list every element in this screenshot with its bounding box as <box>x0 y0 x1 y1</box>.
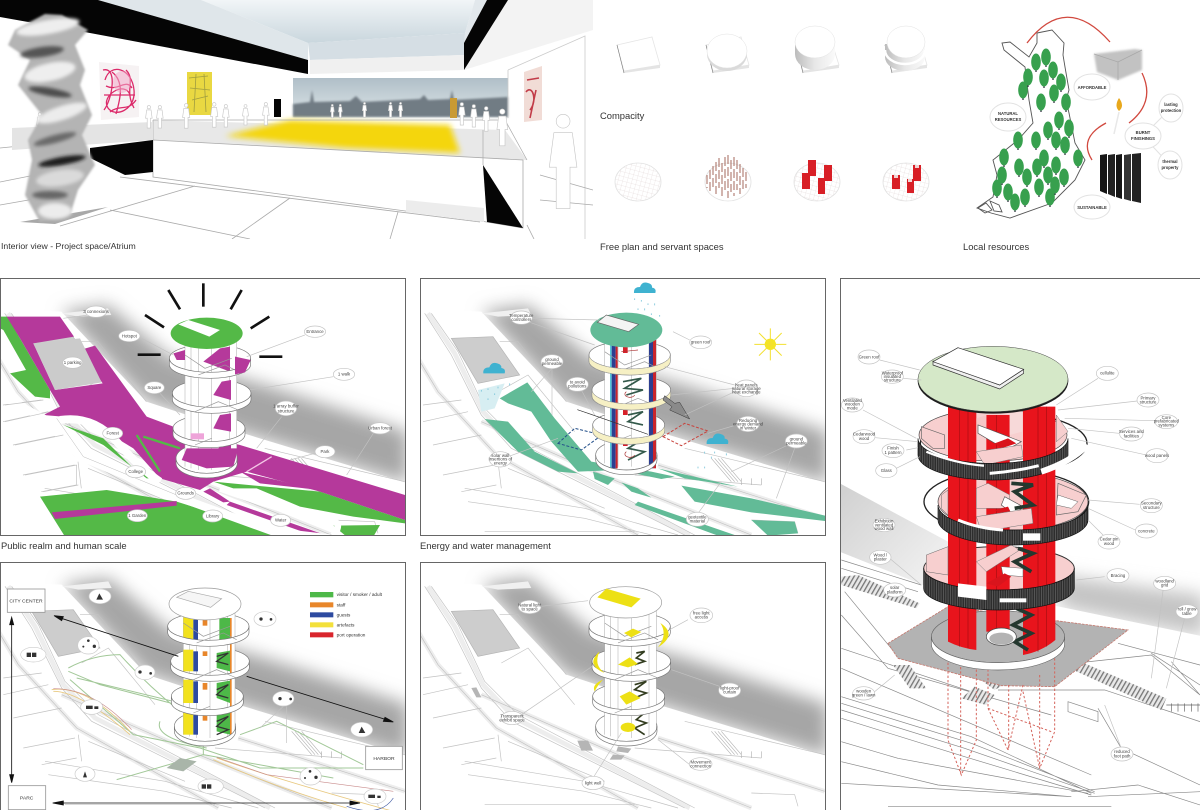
disc: grid <box>615 163 661 201</box>
caption: local resources: Local resources <box>963 241 1029 252</box>
diagram: compacity extrusion sequence <box>617 26 927 73</box>
match flame <box>1114 98 1122 134</box>
sunburst rays <box>138 283 282 357</box>
panel: public realm and human scale <box>0 283 408 555</box>
right wall edge <box>508 36 585 239</box>
disc: red cores <box>794 160 840 201</box>
direction arrows <box>10 616 393 805</box>
site base <box>411 305 828 555</box>
caption: interior view: Interior view - Project space/Atrium <box>1 241 136 251</box>
red arcs <box>1027 17 1147 160</box>
floor interiors <box>919 409 1089 590</box>
tower <box>168 588 249 746</box>
label bubbles: cellulite <box>1100 371 1115 376</box>
label bubbles: structure <box>1143 505 1160 510</box>
wall door <box>274 99 281 117</box>
label bubbles: concrete <box>1138 528 1155 533</box>
label bubbles: structure <box>1140 400 1157 405</box>
label: thermal property: thermal <box>1162 159 1178 164</box>
label bubbles: foot path <box>1114 753 1131 758</box>
label bubbles: light well <box>585 780 601 785</box>
legend: artefacts <box>337 622 355 627</box>
label bubbles: Cedar pin <box>1100 537 1119 542</box>
massing: plate with disc <box>706 34 749 73</box>
burnt wood panels <box>1100 153 1141 203</box>
label bubbles: ventilated <box>875 522 894 527</box>
label bubbles: Hotspot <box>122 333 138 338</box>
diagram: free plan and servant spaces <box>615 155 929 201</box>
label bubbles: ground <box>790 436 804 441</box>
label: burnt finishings: BURNT <box>1136 130 1151 135</box>
green roof disc <box>918 346 1068 414</box>
label: lasting protection: lasting <box>1164 102 1178 107</box>
massing: cylinder <box>795 26 839 73</box>
black cladding bands <box>918 438 1088 610</box>
caption: public realm: Public realm and human scale <box>1 540 127 551</box>
sun <box>754 328 786 360</box>
black ceiling beams <box>0 0 508 74</box>
panel: circulation and user flows <box>0 578 408 810</box>
terrain shading <box>840 483 1200 708</box>
site contour lines <box>841 560 1200 807</box>
label bubbles: heat panels <box>735 382 758 387</box>
label bubbles: woodland <box>1155 578 1175 583</box>
label bubbles: Green roof <box>859 354 880 359</box>
air flow arrows <box>577 396 690 434</box>
red dashed projection lines <box>948 658 1055 775</box>
label bubbles: wood wall <box>874 526 894 531</box>
painting: right wall <box>524 66 542 122</box>
label: thermal property: property <box>1162 165 1179 170</box>
label bubbles: material <box>690 519 705 524</box>
box: parc: PARC <box>20 795 34 801</box>
label bubbles: Finish <box>887 446 899 451</box>
diagram: local resources map of Finland <box>977 17 1183 219</box>
floor plane <box>0 140 593 239</box>
legend <box>310 592 383 637</box>
label bubbles <box>489 311 807 526</box>
teal planted areas <box>485 382 825 536</box>
label: thermal property <box>1158 151 1182 179</box>
label bubbles: wood <box>859 436 870 441</box>
leader lines <box>63 315 373 475</box>
label bubbles: 1 array buffer <box>273 404 299 409</box>
panel: daylight strategy <box>411 578 828 810</box>
label bubbles: Square <box>147 385 162 390</box>
label bubbles: Library <box>206 513 220 518</box>
pictogram glyphs <box>27 593 381 798</box>
site base <box>0 578 408 810</box>
label bubbles: Exhibition <box>875 519 894 524</box>
label: lasting protection <box>1159 94 1183 122</box>
label bubbles: access <box>695 615 708 620</box>
label bubbles: light-proof <box>720 686 740 691</box>
water infiltration zone <box>478 383 505 412</box>
label bubbles: permeable <box>786 440 807 445</box>
label bubbles: heat exchange <box>732 390 761 395</box>
site base <box>0 305 408 555</box>
panel frame: public realm <box>0 278 406 536</box>
label: sustainable <box>1074 195 1110 219</box>
panel frame: daylight <box>420 562 826 810</box>
label bubbles <box>499 600 741 790</box>
label bubbles: Temperature <box>509 313 534 318</box>
hatched paving strips <box>841 575 1200 712</box>
left site lines <box>5 400 78 492</box>
text: compacity: Compacity <box>600 110 645 121</box>
label bubbles: solar <box>890 585 900 590</box>
caption: energy and water: Energy and water management <box>420 540 551 551</box>
leader lines <box>260 706 287 743</box>
box: city center: CITY CENTER <box>9 599 43 605</box>
panel: interior view of project space atrium <box>0 0 593 239</box>
red structural columns <box>948 407 1055 655</box>
box: harbor <box>366 746 402 770</box>
ceiling <box>201 0 475 43</box>
label bubbles: Wood / <box>874 552 888 557</box>
grey crossing <box>167 758 197 771</box>
green ground areas <box>0 317 405 537</box>
map outline <box>977 30 1085 218</box>
legend: port operation <box>337 632 366 637</box>
label bubbles: table <box>1182 611 1192 616</box>
label bubbles: roll / grow <box>1178 607 1197 612</box>
white roads <box>0 395 330 538</box>
painting: yellow <box>187 72 212 115</box>
label bubbles: green / lawn <box>852 693 876 698</box>
disc: columns <box>705 155 751 201</box>
disc: red cores with openings <box>883 163 929 201</box>
dark spiral stairs <box>1011 483 1033 650</box>
label bubbles: to space <box>521 606 538 611</box>
label: natural resources: NATURAL <box>998 111 1018 116</box>
legend: guests <box>337 612 351 617</box>
label bubbles: wooden <box>845 402 861 407</box>
panel frame: energy and water <box>420 278 826 536</box>
label bubbles: Ventilated <box>843 398 862 403</box>
tower <box>169 318 251 478</box>
site base <box>411 578 828 810</box>
rain clouds <box>481 282 728 468</box>
flow lines: green <box>68 655 363 780</box>
label bubbles: Movement <box>691 759 712 764</box>
panel: structure and materials exploded axonometric <box>840 346 1200 807</box>
massing: stacked cylinder <box>885 26 927 73</box>
label bubbles: green roof <box>691 340 711 345</box>
label bubbles: connection <box>690 763 712 768</box>
label bubbles: Grounds <box>177 491 194 496</box>
tower <box>589 587 671 746</box>
label bubbles: Core <box>1162 415 1172 420</box>
box: city center <box>7 589 45 612</box>
magenta public realm <box>7 317 405 537</box>
label bubbles: Natural light <box>518 602 542 607</box>
label bubbles: permeable <box>542 361 563 366</box>
label bubbles <box>841 350 1198 761</box>
label bubbles: 1 Garden <box>128 513 147 518</box>
label: sustainable: SUSTAINABLE <box>1077 205 1107 210</box>
archipelago <box>978 201 1002 213</box>
label bubbles: Glass <box>881 468 892 473</box>
label bubbles: plaster <box>874 557 887 562</box>
label bubbles: Park <box>321 449 330 454</box>
sculpture <box>8 14 108 224</box>
label bubbles: grid <box>1161 583 1169 588</box>
box: harbor: HARBOR <box>373 756 395 762</box>
tower <box>589 313 671 475</box>
label: natural resources <box>990 103 1026 131</box>
label bubbles: 1 pattern <box>884 450 902 455</box>
stair landing circle <box>986 628 1016 645</box>
label bubbles: systems <box>1158 422 1174 427</box>
label: burnt finishings: FINISHINGS <box>1131 136 1155 141</box>
label bubbles: to avoid <box>570 380 585 385</box>
caption: free plan: Free plan and servant spaces <box>600 241 724 252</box>
label: natural resources: RESOURCES <box>995 117 1021 122</box>
label bubbles: wood <box>1104 541 1115 546</box>
label bubbles: 1 parking <box>64 360 82 365</box>
grey footprint plate <box>888 607 1128 687</box>
label: lasting protection: protection <box>1161 108 1182 113</box>
crossings <box>471 687 631 760</box>
floor partitions and white rooms <box>921 412 1086 587</box>
label bubbles: mode <box>847 405 858 410</box>
label bubbles: facilities <box>1124 433 1139 438</box>
label bubbles: insulated <box>884 374 902 379</box>
label bubbles: Bracing <box>1111 573 1126 578</box>
label bubbles: controllers <box>511 317 531 322</box>
base ring <box>931 611 1065 670</box>
painting: pink <box>99 62 139 120</box>
label bubbles: geotextile <box>688 515 707 520</box>
label bubbles: reduced <box>1114 749 1130 754</box>
legend: visitor / smoker / adult <box>337 592 383 597</box>
label bubbles: Cedarwood <box>853 432 876 437</box>
panel: energy and water management <box>421 282 825 535</box>
massing: plain plate <box>617 37 660 73</box>
label bubbles: Water <box>275 518 287 523</box>
parking area <box>33 338 102 390</box>
atrium void with yellow floor <box>12 120 527 228</box>
label bubbles: Forest <box>107 431 120 436</box>
label bubbles: Entrance <box>306 329 324 334</box>
leader lines <box>508 318 795 513</box>
panel frame: structure <box>840 278 1200 810</box>
label bubbles: wooden <box>856 688 872 693</box>
box: parc <box>8 786 46 810</box>
silhouettes <box>37 98 577 209</box>
label bubbles: structure <box>884 378 901 383</box>
pictogram bubbles <box>21 589 386 804</box>
panoramic window <box>293 78 508 117</box>
wood block <box>1094 49 1142 80</box>
label bubbles: Services and <box>1119 429 1144 434</box>
leader lines <box>521 601 720 778</box>
dashed plaza outlines <box>558 423 708 450</box>
label bubbles: prefabricated <box>1154 419 1180 424</box>
label bubbles: platform <box>887 589 903 594</box>
label bubbles: College <box>128 469 144 474</box>
label bubbles: Insertions of <box>489 457 513 462</box>
label: burnt finishings <box>1125 108 1171 165</box>
green strips over plaza <box>137 435 180 472</box>
label bubbles: exhibit space <box>499 717 525 722</box>
label bubbles: energy demand <box>733 422 764 427</box>
label bubbles: pollutions <box>568 384 586 389</box>
label bubbles: energy <box>494 460 508 465</box>
label bubbles: Secondary <box>1141 501 1163 506</box>
panel frame: circulation <box>0 562 406 810</box>
label bubbles: Reducing <box>739 418 758 423</box>
label bubbles: free light <box>693 611 710 616</box>
label: affordable <box>1074 74 1110 100</box>
leader lines <box>863 360 1185 748</box>
label bubbles: wood panels <box>1145 453 1169 458</box>
label bubbles: Transparent <box>500 713 524 718</box>
label bubbles: Waterproof <box>882 370 904 375</box>
label bubbles: in winter <box>740 425 757 430</box>
label bubbles <box>63 306 393 526</box>
label bubbles: solar wall <box>491 453 509 458</box>
label bubbles: 3 connexions <box>83 309 109 314</box>
label bubbles: structure <box>278 408 295 413</box>
label: affordable: AFFORDABLE <box>1078 85 1107 90</box>
legend: staff <box>337 602 346 607</box>
label bubbles: ground <box>545 357 559 362</box>
flow lines: vehicle routes <box>52 689 393 810</box>
label bubbles: natural storage <box>732 386 761 391</box>
label bubbles: curtain <box>723 690 737 695</box>
label bubbles: Primary <box>1141 395 1156 400</box>
label bubbles: 1 walk <box>338 372 351 377</box>
forest trees <box>992 48 1083 212</box>
label bubbles: Urban forest <box>368 426 393 431</box>
